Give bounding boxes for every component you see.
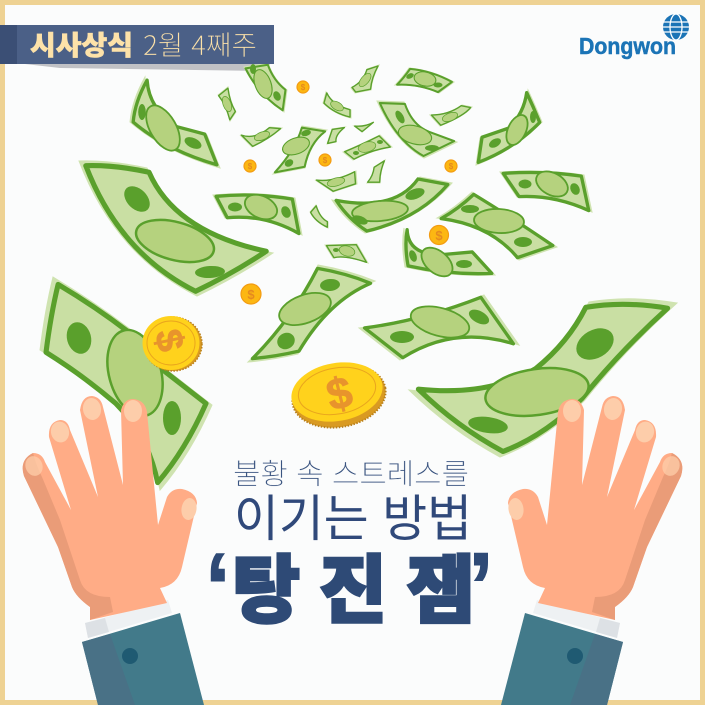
banknote: P bbox=[354, 122, 374, 132]
coin: top 2: $ bbox=[248, 162, 253, 171]
coin: top 1 bbox=[297, 81, 309, 93]
banknote: M bbox=[395, 68, 454, 93]
coin: medium left bbox=[241, 284, 261, 304]
banknote: large right bbox=[409, 299, 677, 457]
hand bbox=[507, 396, 682, 620]
coin: large left bbox=[142, 316, 202, 371]
banknote: Q bbox=[476, 90, 542, 165]
banknote: V bbox=[367, 160, 385, 183]
banknote: R bbox=[500, 166, 592, 212]
banknote: small E bbox=[218, 87, 236, 121]
banknote: large left bbox=[79, 161, 273, 296]
coin: top 4 bbox=[445, 160, 457, 172]
subtitle line 1: 불황 속 스트레스를 bbox=[233, 451, 469, 493]
opening quote: ‘ bbox=[204, 532, 232, 644]
banknote: J bbox=[315, 171, 357, 192]
cuff bbox=[85, 600, 172, 638]
sleeve bbox=[82, 613, 204, 705]
logo: Dongwon: Dongwon bbox=[579, 33, 676, 59]
banknote: large lower left bbox=[40, 277, 212, 490]
header title: 시사상식 bbox=[30, 24, 133, 63]
coin: large center: $ bbox=[322, 367, 357, 421]
logo: Dongwon bbox=[579, 14, 689, 59]
banknote: G bbox=[273, 126, 327, 174]
right hand and sleeve bbox=[501, 396, 682, 705]
closing quote: ’ bbox=[467, 532, 495, 644]
banknote: C bbox=[213, 190, 302, 235]
coin: top 1: $ bbox=[301, 83, 306, 92]
banknote: T bbox=[437, 192, 557, 260]
banknote: H bbox=[323, 92, 351, 118]
banknote: K bbox=[343, 135, 392, 160]
coin: large left: $ bbox=[146, 326, 191, 355]
header shadow bbox=[25, 64, 270, 71]
cuff bbox=[533, 600, 620, 638]
coin: medium right: $ bbox=[435, 228, 443, 243]
coin: medium right bbox=[430, 226, 448, 244]
coin: top 3 bbox=[319, 154, 331, 166]
banknote: Y bbox=[248, 265, 375, 362]
subtitle line 2: 이기는 방법 bbox=[234, 479, 472, 551]
header band bbox=[0, 24, 274, 64]
banknote: O bbox=[430, 105, 472, 126]
banknote: L bbox=[351, 65, 379, 93]
coin: large center bbox=[287, 355, 391, 435]
sleeve bbox=[501, 613, 623, 705]
hand bbox=[23, 396, 198, 620]
header date: 2월 4째주 bbox=[143, 24, 257, 63]
banknote: N bbox=[377, 101, 457, 158]
banknote: small F bbox=[240, 127, 282, 147]
banknote: I bbox=[327, 127, 345, 144]
coin: top 4: $ bbox=[449, 162, 454, 171]
coin: top 3: $ bbox=[323, 156, 328, 165]
banknote: top small bbox=[244, 63, 287, 112]
banknote: W bbox=[310, 205, 328, 228]
coin: top 2 bbox=[244, 160, 256, 172]
main title: 탕진잼 bbox=[232, 531, 475, 638]
coin: medium left: $ bbox=[247, 287, 255, 302]
banknote: upper left bbox=[130, 77, 220, 168]
banknote: U bbox=[403, 228, 495, 282]
banknote: X bbox=[325, 244, 368, 263]
left hand and sleeve bbox=[23, 396, 204, 705]
banknote: Z bbox=[359, 295, 519, 360]
banknote: S bbox=[332, 177, 452, 233]
